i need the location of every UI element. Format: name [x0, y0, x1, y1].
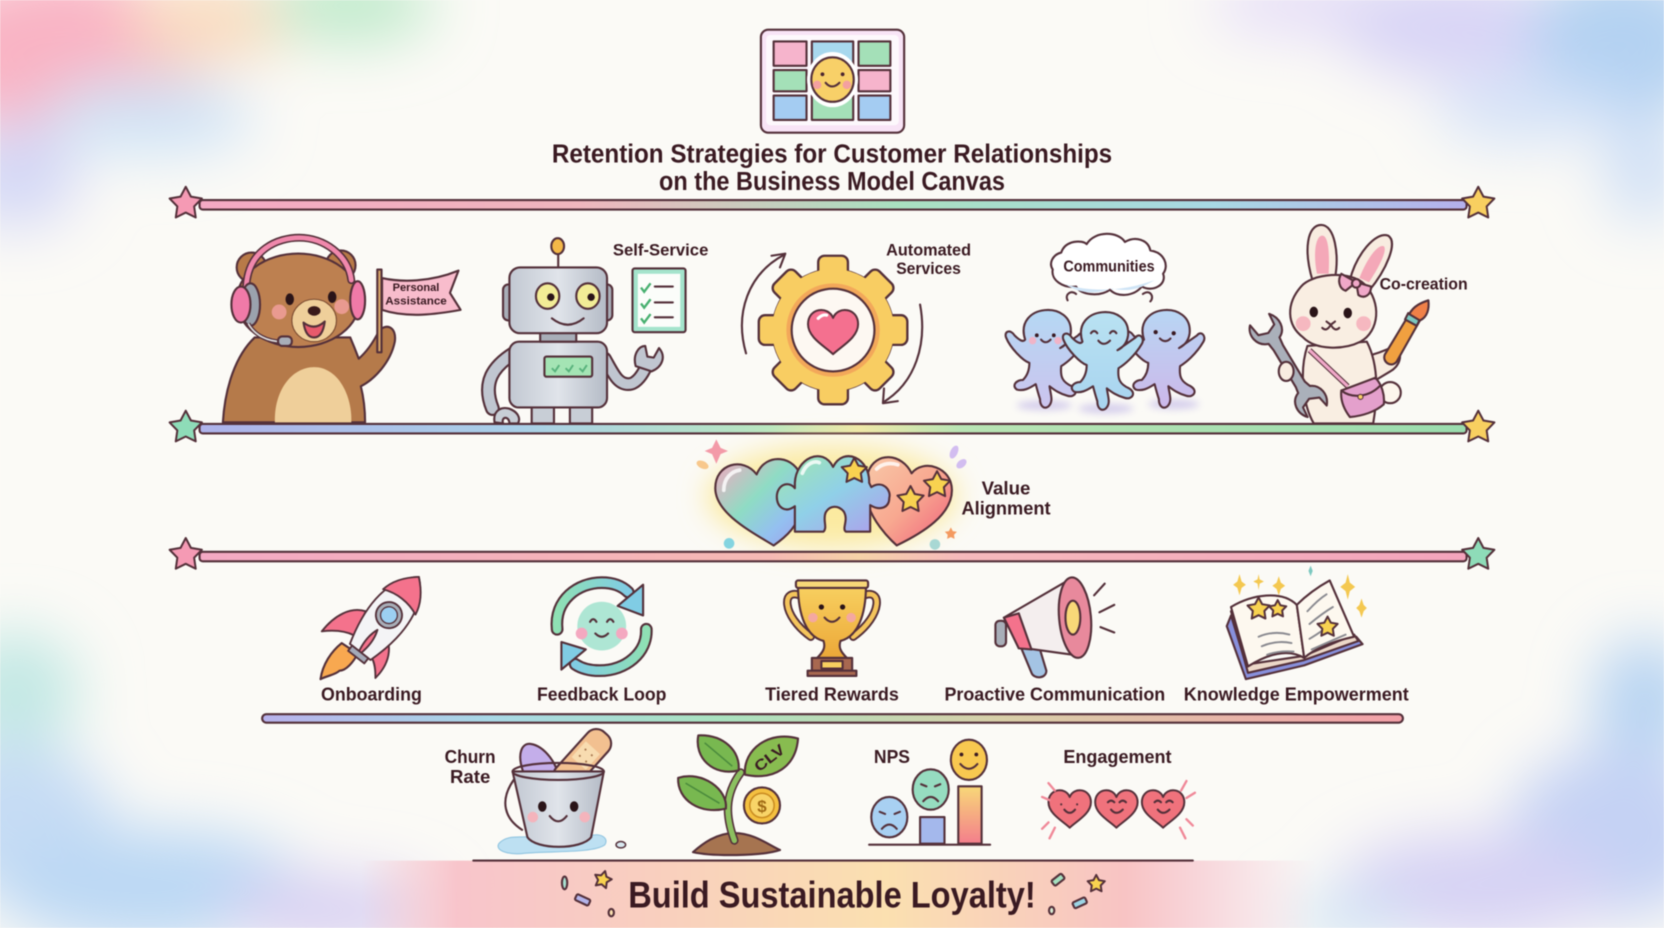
value alignment hearts — [695, 439, 1051, 550]
clv leaf: CLV — [752, 742, 789, 776]
proactive communication megaphone — [995, 576, 1114, 677]
heart faces — [1061, 801, 1173, 813]
banner headline: Build Sustainable Loyalty! — [628, 873, 1036, 915]
handles — [787, 594, 877, 637]
bucket body — [513, 771, 604, 847]
thought cloud — [1051, 234, 1166, 301]
bandage — [549, 724, 616, 795]
face — [527, 801, 590, 822]
robot neck — [540, 332, 576, 342]
cup — [798, 586, 866, 658]
rotation arrow right — [883, 305, 922, 403]
communities — [1006, 234, 1204, 413]
soil — [693, 833, 780, 855]
bottom arrow — [561, 629, 646, 671]
title: Retention Strategies for Customer Relationships — [552, 140, 1112, 168]
bear ears — [237, 250, 356, 282]
cone — [1004, 579, 1080, 656]
figure center — [1063, 312, 1143, 410]
divider rail with stars 2 — [170, 411, 1494, 441]
bottom banner wash — [361, 861, 1316, 928]
churn rate label — [445, 746, 496, 787]
robot: self-service — [488, 238, 708, 423]
value alignment label: Alignment — [961, 498, 1051, 519]
thought cloud: Communities — [1063, 259, 1155, 276]
subtitle line of title: on the Business Model Canvas — [659, 168, 1005, 196]
personal assistance flag: Assistance — [385, 296, 447, 308]
heart highlights — [724, 462, 898, 490]
onboarding label: Onboarding — [321, 683, 422, 704]
sparkles — [1233, 566, 1367, 618]
handle — [505, 780, 522, 830]
fins — [319, 598, 404, 678]
wrench — [1246, 310, 1331, 420]
NPS chart — [869, 740, 990, 845]
puddle — [498, 835, 606, 854]
banner top line — [473, 860, 1193, 862]
gear icon — [759, 256, 907, 404]
self-service label: Self-Service — [613, 242, 708, 260]
value alignment label — [961, 478, 1051, 519]
automated services label — [886, 242, 971, 278]
churn rate label: Rate — [450, 766, 490, 787]
flame — [321, 643, 358, 679]
CLV plant with coin — [678, 735, 798, 855]
rays — [1042, 781, 1195, 838]
proactive communication label: Proactive Communication — [944, 683, 1165, 704]
robot legs — [532, 406, 592, 423]
personal assistance flag: Personal — [393, 282, 439, 294]
window — [371, 597, 407, 633]
robot torso — [509, 342, 607, 407]
figure left — [1006, 310, 1086, 408]
face — [808, 604, 856, 622]
headset — [231, 238, 365, 346]
bunny tail — [1380, 382, 1401, 403]
bunny arm with brush — [1365, 300, 1429, 384]
gear with heart: automated services — [742, 242, 971, 404]
divider rail with stars 1 — [170, 187, 1494, 217]
handle — [1021, 647, 1046, 677]
bunny hand — [1279, 362, 1294, 381]
robot antenna — [551, 238, 564, 267]
churn rate label: Churn — [445, 746, 496, 767]
robot head — [503, 267, 612, 333]
figure right — [1124, 310, 1204, 408]
lavender patch — [520, 744, 558, 777]
engagement label: Engagement — [1063, 746, 1172, 767]
confetti left — [562, 869, 614, 916]
bunny body — [1303, 342, 1376, 423]
onboarding rocket — [319, 550, 441, 679]
left heart — [715, 459, 801, 545]
page stack — [1231, 611, 1358, 673]
tiered rewards label: Tiered Rewards — [765, 683, 899, 704]
bunny bow — [1339, 274, 1371, 297]
puzzle piece — [777, 456, 890, 532]
page lines — [1259, 594, 1346, 655]
base — [812, 658, 852, 671]
coin: $ — [757, 797, 767, 816]
feedback loop — [557, 583, 646, 671]
bunny: co-creation — [1246, 225, 1468, 423]
bag strap and bag — [1310, 350, 1384, 417]
figure shadows — [1017, 400, 1199, 413]
sparkles — [695, 439, 968, 550]
automated services label: Automated — [886, 242, 971, 260]
co-creation label: Co-creation — [1380, 276, 1468, 294]
top arrow — [557, 583, 643, 629]
feedback loop label: Feedback Loop — [537, 683, 666, 704]
happy face — [951, 740, 987, 780]
bars — [920, 817, 944, 844]
rotation arrow left — [742, 254, 785, 353]
tiered rewards trophy — [787, 580, 877, 676]
confetti right — [1049, 873, 1105, 914]
cover — [1227, 615, 1363, 679]
right page — [1297, 580, 1354, 658]
rocket body — [344, 564, 435, 665]
book stars — [1247, 597, 1338, 636]
divider rail 4 — [262, 714, 1403, 723]
neutral face — [913, 769, 949, 810]
checklist — [632, 268, 686, 332]
personal assistance flag — [377, 270, 461, 352]
NPS label: NPS — [874, 746, 910, 767]
robot right arm — [605, 359, 646, 384]
bunny ears — [1308, 225, 1392, 291]
churn bucket — [498, 724, 626, 854]
automated services label: Services — [896, 260, 961, 278]
bunny head — [1290, 275, 1376, 348]
divider rail with stars 3 — [170, 538, 1494, 569]
bell — [1056, 576, 1094, 659]
leaves — [678, 735, 739, 810]
knowledge empowerment label: Knowledge Empowerment — [1184, 683, 1409, 704]
sound lines — [1094, 584, 1114, 632]
robot left arm — [488, 353, 514, 409]
left page — [1231, 595, 1304, 666]
bear body — [223, 327, 395, 422]
face — [576, 602, 628, 651]
gold stars — [842, 458, 950, 511]
unhappy face — [871, 797, 907, 837]
bear: personal assistance — [223, 238, 461, 422]
right heart — [868, 457, 952, 545]
value alignment label: Value — [982, 478, 1030, 499]
stem — [728, 773, 741, 840]
title icon: business model canvas — [761, 30, 904, 133]
bear head — [237, 254, 360, 347]
engagement hearts — [1042, 781, 1195, 838]
yellow glow — [707, 446, 957, 548]
knowledge empowerment book — [1227, 566, 1367, 679]
